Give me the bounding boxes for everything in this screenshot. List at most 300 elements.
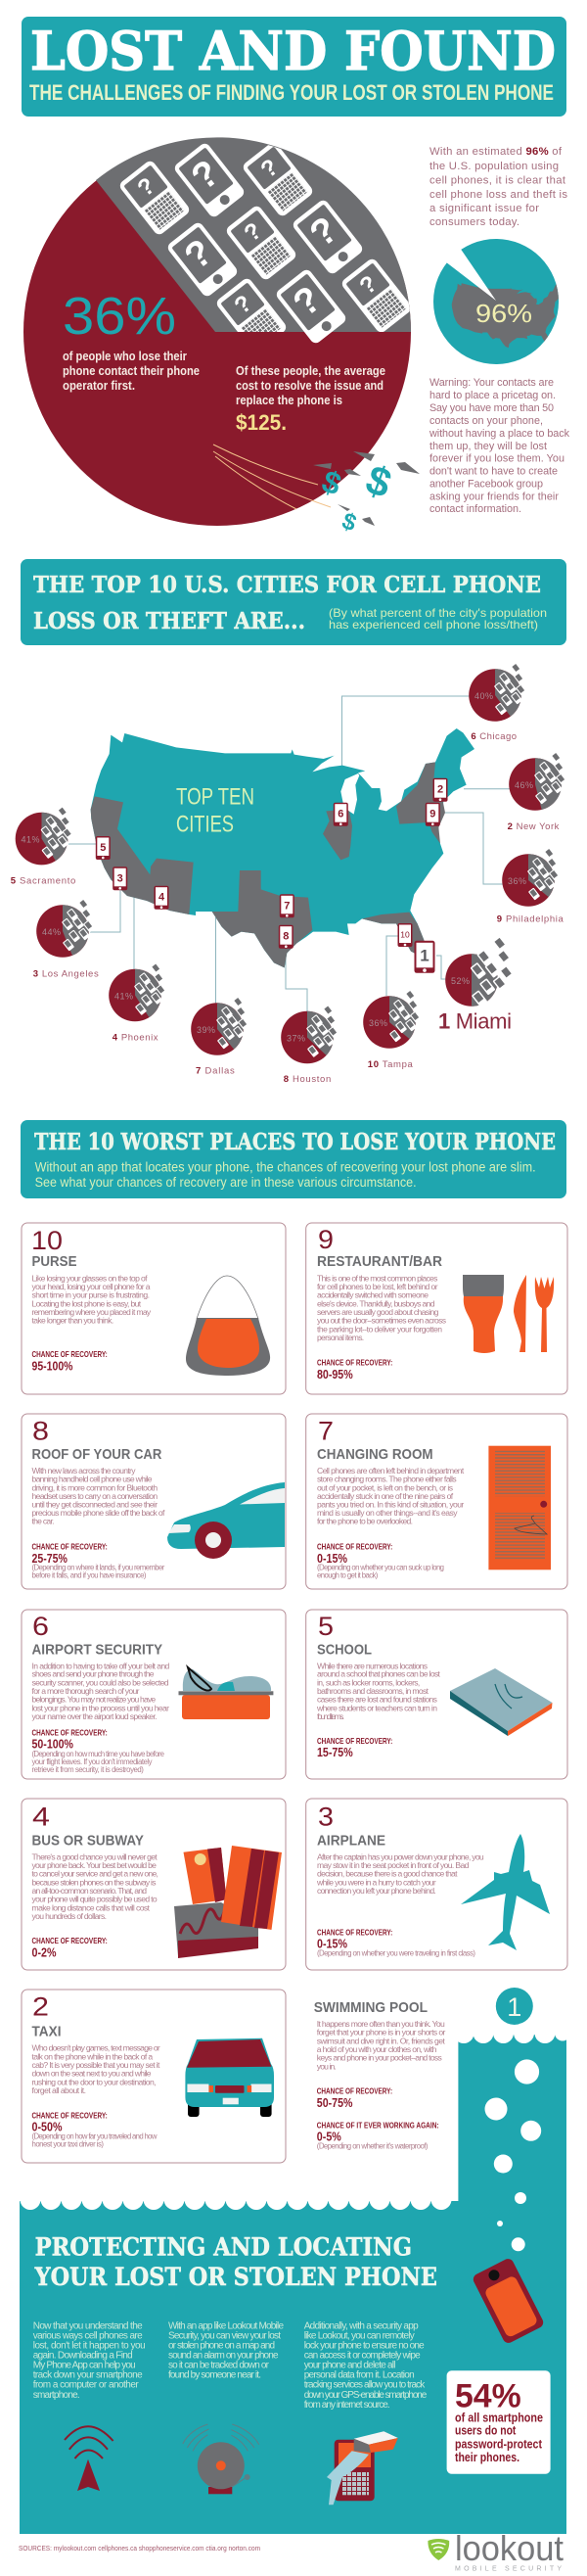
body text [31, 1661, 170, 1721]
icon: flying money [213, 445, 420, 538]
text: warning: them up, they will be lost [429, 441, 547, 452]
pie: Sacramento: 41% [22, 835, 39, 845]
pie: Philadelphia [497, 848, 564, 924]
text: average cost: replace the phone is [236, 393, 342, 407]
text column 3: personal data from it. Location [304, 2370, 415, 2381]
number: 5 [318, 1612, 334, 1641]
number badge 1 [496, 1988, 533, 2025]
recovery chance [317, 1359, 392, 1382]
body text: banning handheld cell phone use while [31, 1475, 153, 1484]
phone pins: 7 [284, 900, 290, 912]
pie: Tampa: 36% [369, 1018, 387, 1028]
phones grid [119, 143, 410, 332]
body text: your head, losing your cell phone for a [31, 1282, 151, 1291]
panel: restaurant/bar [306, 1223, 567, 1394]
body text: for a more thorough search of your [31, 1686, 140, 1696]
body text: lost your phone in the process until you hear [31, 1703, 169, 1712]
heading: ROOF OF YOUR CAR [31, 1446, 161, 1463]
recovery chance: 80-95% [317, 1368, 353, 1382]
body text: the parking lot--to deliver your forgotten [317, 1324, 442, 1334]
water scallops [20, 2023, 570, 2210]
note [329, 606, 547, 632]
recovery chance: (Depending on where it lands, if you remember [31, 1564, 165, 1572]
text: 96% intro: cell phones, it is clear that [429, 174, 566, 186]
text column 1: lost, don't let it happen to you [33, 2341, 146, 2352]
body text: you in. [317, 2061, 337, 2071]
body text: cab? It is very possible that you may set it [31, 2060, 160, 2070]
text: 96% intro: With an estimated 96% of [429, 146, 563, 158]
panel: airport security [22, 1610, 286, 1779]
body text: a hold of you with your clothes on, with [317, 2044, 437, 2054]
text: warning: another Facebook group [429, 478, 543, 490]
body text: shoes and send your phone through the [31, 1669, 155, 1679]
body text: your phone back. Your best bet would be [31, 1860, 157, 1870]
pie: Miami: 52% [451, 976, 470, 986]
icon: antenna [65, 2426, 113, 2491]
pie: Dallas [191, 997, 249, 1077]
heading: PURSE [31, 1253, 76, 1270]
number: 6 [32, 1612, 49, 1641]
pie: Houston: 37% [287, 1034, 305, 1044]
phone pins: 3 [117, 872, 123, 884]
phones grid: ? [302, 210, 345, 256]
recovery chance [31, 1350, 108, 1373]
recovery chance: enough to get it back) [317, 1571, 379, 1580]
icon: book [450, 1668, 552, 1736]
pie: Tampa [363, 990, 422, 1070]
body text [31, 2043, 160, 2095]
heading: PROTECTING AND LOCATING [35, 2232, 412, 2261]
map label: CITIES [176, 811, 234, 837]
overlapping phone: ? [286, 279, 329, 325]
recovery chance: CHANCE OF RECOVERY: [317, 1543, 392, 1552]
phones grid: ? [177, 232, 220, 278]
body text: because stolen phones on the subway is [31, 1877, 157, 1887]
pie: New York: 46% [515, 780, 533, 790]
body text: while you were in a hurry to catch your [316, 1877, 436, 1887]
note: (By what percent of the city's population [329, 606, 547, 620]
text column 2 [168, 2320, 284, 2381]
recovery chance [317, 1737, 392, 1759]
heading: AIRPORT SECURITY [31, 1641, 162, 1658]
callout: 54% [447, 2370, 551, 2474]
body text: bathrooms and classrooms, in most [317, 1686, 429, 1696]
pie: Chicago: 40% [474, 691, 493, 701]
icon: flying money: $ [339, 507, 360, 538]
phone pins: 4 [158, 892, 165, 904]
body text: may stow it in the seat pocket in front of you. Bad [317, 1860, 470, 1870]
body text: security scanner, you could also be selected [31, 1677, 169, 1687]
text column 3: lock your phone to ensure no one [304, 2341, 425, 2352]
phones grid: ? [230, 290, 257, 320]
body text: else's device. Thankfully, busboys and [317, 1298, 435, 1308]
recovery chance: (Depending on whether you were traveling in first class) [317, 1949, 475, 1958]
title: LOST AND FOUND [30, 20, 556, 82]
heading: CHANGING ROOM [317, 1446, 433, 1463]
header banner [22, 17, 566, 117]
heading: AIRPLANE [317, 1832, 385, 1849]
phone pins: 6 [338, 809, 343, 820]
phones grid: ? [240, 217, 267, 248]
recovery chance: CHANCE OF RECOVERY: [31, 2112, 108, 2121]
body text: for cell phones to be lost, left behind or [317, 1282, 438, 1291]
body text: store changing rooms. The phone either falls [317, 1475, 457, 1484]
icon: car [167, 1482, 285, 1559]
text: warning: contact information. [429, 503, 521, 515]
heading: YOUR LOST OR STOLEN PHONE [34, 2263, 437, 2291]
recovery chance: 25-75% [31, 1552, 68, 1566]
number: 9 [318, 1225, 334, 1254]
icon: flying money: $ [360, 455, 397, 507]
recovery chance: 50-100% [31, 1738, 73, 1752]
intro text [35, 1160, 536, 1190]
text column 3: tracking services allow you to track [304, 2380, 426, 2391]
recovery chance: 0-15% [317, 1552, 347, 1566]
callout: 54%: 54% [455, 2377, 521, 2414]
body text: where students or teachers can turn in [316, 1703, 437, 1712]
body text: headset users to carry on a conversation [31, 1491, 158, 1501]
phone pins: 5 [100, 842, 106, 854]
phone pins: 8 [283, 931, 289, 943]
sources: SOURCES: mylookout.com cellphones.ca shopphoneservice.com ctia.org norton.com [19, 2544, 260, 2553]
body text: With new laws across the country [31, 1466, 136, 1475]
text column 1: various ways cell phones are [33, 2330, 143, 2341]
heading: THE TOP 10 U.S. CITIES FOR CELL PHONE [33, 572, 541, 598]
heading [33, 572, 541, 634]
text column 2: or stolen phone on a map and [168, 2341, 275, 2352]
text: 96% intro: a significant issue for [429, 203, 539, 214]
text column 1: smartphone. [33, 2390, 80, 2401]
icon: shield [428, 2539, 449, 2560]
icon: credit cards [174, 1846, 282, 1958]
body text: In addition to having to take off your belt and [31, 1661, 170, 1670]
body text: belongings. You may not realize you have [31, 1695, 156, 1705]
body text: Locating the lost phone is easy, but [31, 1298, 142, 1308]
pie: Tampa: 10 Tampa [368, 1059, 414, 1070]
body text: talk on the phone while in the back of a [31, 2051, 153, 2061]
icon: phone being wiped [327, 2431, 398, 2505]
note: has experienced cell phone loss/theft) [329, 618, 538, 632]
text column 3: your phone and delete all [304, 2361, 395, 2371]
body text [31, 1273, 152, 1326]
recovery chance: retrieve it from security, it is destroyed) [31, 1765, 144, 1774]
text: contact operator: phone contact their phone [63, 363, 200, 378]
recovery chance [31, 2112, 158, 2149]
text: warning: asking your friends for their [429, 492, 559, 503]
heading: RESTAURANT/BAR [317, 1253, 442, 1270]
recovery chance: CHANCE OF RECOVERY: [31, 1729, 108, 1738]
text column 2: so it can be tracked down or [168, 2361, 270, 2371]
text column 3: Additionally, with a security app [304, 2320, 419, 2331]
text: warning: don't want to have to create [429, 466, 558, 478]
map: united states [91, 728, 474, 967]
panel: changing room [306, 1414, 567, 1589]
icon: door [488, 1446, 551, 1569]
pie: Phoenix [109, 962, 167, 1044]
pie: Philadelphia: 9 Philadelphia [497, 914, 564, 924]
map label: TOP TEN [176, 784, 254, 811]
text column 3 [304, 2320, 428, 2411]
heading [34, 2232, 437, 2291]
icon: security tray [178, 1667, 273, 1719]
text: warning: Say you have more than 50 [429, 402, 554, 414]
icon: airplane [461, 1834, 550, 1950]
heading: SWIMMING POOL [314, 1999, 428, 2016]
body text: keys and phone in your pocket--and toss [317, 2053, 442, 2063]
logo: lookout: lookout [455, 2528, 564, 2568]
overlapping phone [274, 267, 348, 346]
body text: an all-too-common scenario. That, and [31, 1886, 147, 1896]
heading: TAXI [31, 2023, 61, 2039]
callout: 54%: their phones. [455, 2451, 519, 2464]
body text: forget that your phone is in your shorts or [317, 2028, 446, 2037]
body text [317, 1273, 446, 1342]
recovery chance: (Depending on whether you can suck up long [317, 1564, 444, 1572]
body text: accidentally switched with someone [317, 1290, 429, 1300]
body text: mind is usually on other things--and it's easy [317, 1508, 458, 1518]
phones grid: ? [355, 270, 383, 301]
body text: until they get disconnected and see their [31, 1499, 158, 1509]
recovery chance: CHANCE OF RECOVERY: [317, 1737, 392, 1746]
pie: Los Angeles [33, 899, 99, 979]
pie: Houston: 8 Houston [284, 1074, 331, 1085]
text column 1 [33, 2320, 146, 2401]
recovery chance: 95-100% [31, 1359, 72, 1373]
intro text: See what your chances of recovery are in these various circumstance. [35, 1175, 417, 1190]
recovery chance: 0-5% [317, 2130, 341, 2143]
body text: the car. [31, 1517, 55, 1526]
body text: driving, it is more common for Bluetooth [31, 1482, 158, 1492]
pie: Phoenix: 41% [114, 991, 133, 1001]
body text: out of your pocket, is left on the bench, or is [317, 1482, 453, 1492]
pie: Miami: 1 Miami [438, 1008, 512, 1034]
number: 4 [32, 1802, 50, 1831]
text: 96% intro [429, 146, 567, 228]
body text: rushing out the door to your destination, [31, 2077, 157, 2086]
body text: you hundreds of dollars. [31, 1911, 107, 1921]
icon: sinking phone [472, 2257, 545, 2345]
body text: you out the door--sometimes even across [317, 1316, 446, 1326]
recovery chance [31, 1937, 108, 1959]
body text: precious mobile phone slide off the back of [31, 1508, 165, 1518]
body text: your phone will quite possibly be used to [31, 1895, 158, 1904]
text column 1: track down your smartphone [33, 2370, 143, 2381]
icon: taxi [185, 2038, 274, 2117]
callout: 54%: users do not [455, 2424, 517, 2438]
body text: pants you tried on. In this kind of situation, your [317, 1499, 464, 1509]
phone pins: 10 [400, 930, 410, 940]
number badge 1: 1 [507, 1992, 521, 2022]
recovery chance: CHANCE OF RECOVERY: [31, 1350, 108, 1359]
body text: There's a good chance you will never get [31, 1851, 158, 1861]
recovery chance [317, 2087, 439, 2151]
text column 2: found by someone near it. [168, 2370, 261, 2381]
body text: short time in your purse is frustrating. [31, 1290, 150, 1300]
phone pins: 2 [437, 784, 443, 796]
map label [176, 784, 254, 837]
recovery chance: 0-15% [317, 1937, 347, 1950]
pie: Dallas: 39% [197, 1025, 215, 1035]
phone pins: 9 [429, 809, 435, 820]
recovery chance [317, 1929, 475, 1958]
icon: alarm bell [183, 2424, 259, 2494]
text: warning [429, 377, 570, 515]
text: 96% intro: the U.S. population using [429, 161, 559, 172]
panel: taxi [22, 1990, 286, 2163]
body text: While there are numerous locations [317, 1661, 428, 1670]
pie: Houston [281, 1005, 339, 1085]
panel: swimming pool [314, 1988, 533, 2151]
recovery chance: CHANCE OF RECOVERY: [31, 1543, 108, 1552]
callout: 54%: of all smartphone [455, 2411, 543, 2424]
text column 2: sound an alarm on your phone [168, 2351, 279, 2362]
body text: connection you left your phone behind. [317, 1886, 436, 1896]
body text: servers are usually good about chasing [317, 1307, 439, 1317]
body text: found items. [317, 1711, 344, 1721]
recovery chance: CHANCE OF RECOVERY: [317, 1929, 392, 1938]
phones grid: ? [133, 172, 160, 203]
bubbles [485, 2059, 541, 2251]
logo: lookout: MOBILE SECURITY [455, 2566, 562, 2573]
text column 2: Security, you can view your lost [168, 2330, 281, 2341]
panel: bus or subway [22, 1799, 286, 1970]
body text: personal items. [317, 1333, 364, 1342]
pie: Dallas: 7 Dallas [196, 1065, 235, 1077]
body text: Who doesn't play games, text message or [31, 2043, 160, 2053]
text column 1: again. Downloading a Find [33, 2351, 133, 2362]
body text: for the phone to be overlooked. [317, 1517, 413, 1526]
icon: glass and cutlery [463, 1275, 554, 1353]
body text [316, 1661, 441, 1721]
body text: swimsuit and dive right in. Or, friends get [317, 2036, 445, 2045]
body text: in, such as locker rooms, lockers, [317, 1677, 420, 1687]
body text [31, 1851, 158, 1921]
body text: take longer than you think. [31, 1316, 113, 1326]
recovery chance [31, 1729, 164, 1774]
text: average cost: cost to resolve the issue and [236, 378, 384, 393]
body text: It happens more often than you think. You [317, 2019, 445, 2029]
body text: to cancel your service and get a new one, [31, 1869, 158, 1879]
phone pins [96, 778, 448, 973]
text: warning: forever if you lose them. You [429, 452, 564, 464]
recovery chance [317, 1543, 444, 1580]
body text [316, 1851, 484, 1896]
text column 3: like Lookout, you can remotely [304, 2330, 415, 2341]
text column 1: from a computer or another [33, 2380, 139, 2391]
number: 8 [32, 1417, 49, 1446]
text: average cost: Of these people, the average [236, 363, 385, 378]
recovery chance: CHANCE OF RECOVERY: [31, 1937, 108, 1945]
heading: LOSS OR THEFT ARE... [33, 608, 305, 634]
pie: Los Angeles: 3 Los Angeles [33, 969, 99, 979]
body text: This is one of the most common places [317, 1273, 437, 1283]
number: 2 [32, 1992, 49, 2022]
body text: Cell phones are often left behind in department [317, 1466, 465, 1475]
intro text: Without an app that locates your phone, the chances of recovering your lost phone are slim. [35, 1160, 536, 1175]
pie: Chicago: 6 Chicago [471, 731, 517, 742]
number: 10 [31, 1226, 63, 1255]
header: 10 worst places [21, 1120, 566, 1198]
panel: roof of your car [22, 1414, 286, 1589]
phones grid: ? [184, 153, 227, 199]
body text: forget all about it. [31, 2085, 86, 2095]
pie: Phoenix: 4 Phoenix [113, 1032, 158, 1044]
body text [317, 2019, 446, 2071]
recovery chance: CHANCE OF RECOVERY: [317, 1359, 392, 1368]
body text: accidentally stuck in one of the nine pairs of [317, 1491, 454, 1501]
pie: New York [508, 752, 567, 832]
body text: remembering where you placed it may [31, 1307, 152, 1317]
recovery chance: (Depending on how much time you have before [31, 1750, 164, 1758]
recovery chance: honest your taxi driver is) [31, 2140, 104, 2149]
pie: Miami [438, 936, 516, 1034]
icon: flying money: $ [317, 463, 346, 502]
body text: cases there are lost and found stations [317, 1695, 437, 1705]
recovery chance: before it falls, and if you have insurance) [31, 1571, 147, 1580]
text column 1: Now that you understand the [33, 2320, 143, 2331]
recovery chance: (Depending on whether it's waterproof) [317, 2142, 429, 2151]
text: warning: contacts on your phone, [429, 415, 543, 427]
text column 2: With an app like Lookout Mobile [168, 2320, 284, 2331]
text: warning: hard to place a pricetag on. [429, 390, 556, 401]
body text: around a school that phones can be lost [317, 1669, 441, 1679]
text: contact operator: operator first. [63, 378, 135, 393]
logo: lookout [428, 2528, 564, 2573]
recovery chance: 0-2% [31, 1945, 57, 1959]
callout: 54%: password-protect [455, 2438, 543, 2452]
number: 3 [318, 1802, 334, 1831]
phone pins: 1 [420, 946, 429, 964]
body text: down on the seat next to you and while [31, 2069, 152, 2079]
pie: Sacramento [11, 806, 75, 887]
recovery chance: 0-50% [31, 2121, 63, 2134]
text: contact operator [63, 349, 200, 393]
heading: SCHOOL [317, 1641, 372, 1658]
statistic 36%: 36% [63, 287, 176, 346]
panel: purse [22, 1223, 286, 1394]
header: top 10 cities [21, 559, 566, 645]
highlighted states [91, 762, 445, 967]
pie: Sacramento: 5 Sacramento [11, 875, 75, 887]
recovery chance: CHANCE OF RECOVERY: [317, 2087, 392, 2096]
text: average cost: $125. [236, 410, 287, 435]
number: 7 [318, 1417, 334, 1446]
chart: 96% US circle [433, 239, 564, 364]
pie: Chicago [469, 663, 527, 742]
recovery chance: CHANCE OF IT EVER WORKING AGAIN: [317, 2121, 439, 2130]
body text [31, 1466, 165, 1526]
text column 3: from any internet source. [304, 2400, 390, 2411]
body text [317, 1466, 465, 1526]
text column 3: down your GPS-enable smartphone [304, 2390, 428, 2401]
text: 96% intro: cell phone loss and theft is [429, 189, 567, 201]
text: warning: Warning: Your contacts are [429, 377, 554, 389]
pie: New York: 2 New York [508, 821, 560, 832]
recovery chance: 15-75% [317, 1746, 353, 1759]
pie: Philadelphia: 36% [508, 876, 526, 886]
body text: Like losing your glasses on the top of [31, 1273, 148, 1283]
connector lines [68, 696, 510, 1012]
recovery chance [31, 1543, 165, 1580]
recovery chance: your flight leaves. If you don't immediately [31, 1757, 153, 1766]
body text: After the captain has you power down your phone, you [317, 1851, 484, 1861]
text: warning: without having a place to back [429, 428, 570, 440]
text: contact operator: of people who lose their [63, 349, 187, 363]
text: 96% intro: consumers today. [429, 216, 519, 228]
recovery chance: 50-75% [317, 2096, 352, 2110]
text: average cost [236, 363, 385, 435]
text column 1: My Phone App can help you [33, 2361, 136, 2371]
